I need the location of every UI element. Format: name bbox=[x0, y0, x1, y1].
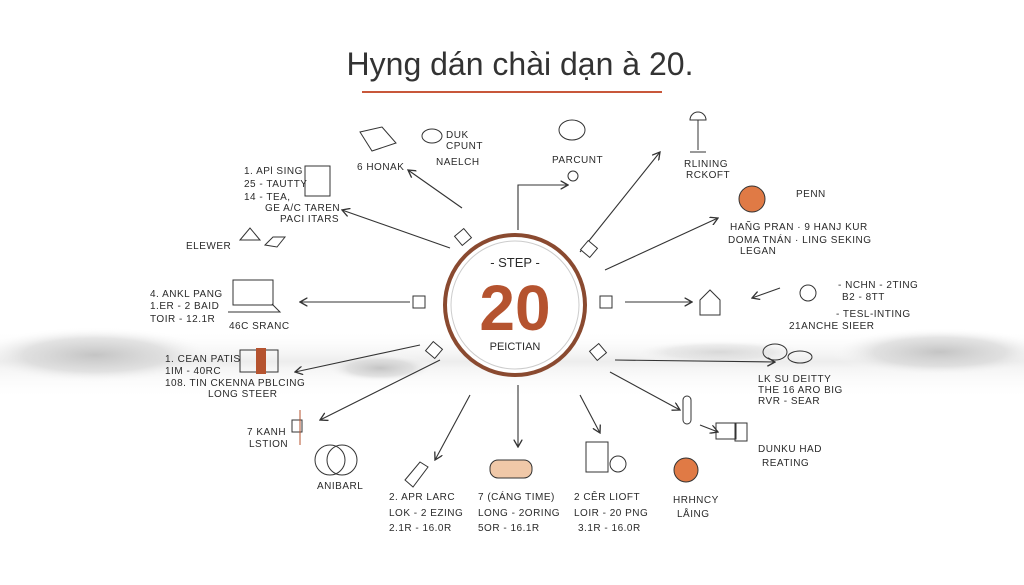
items bottom: LONG - 2ORING bbox=[478, 508, 560, 519]
items right: 21ANCHE bbox=[789, 321, 839, 332]
center circle: PEICTIAN bbox=[490, 341, 540, 353]
items left: 25 - TAUTTY bbox=[244, 179, 307, 190]
center circle: - STEP - bbox=[490, 255, 540, 270]
items bottom: LOIR - 20 PNG bbox=[574, 508, 648, 519]
small step tags bbox=[413, 229, 612, 360]
items right: LEGAN bbox=[740, 246, 776, 257]
items right: REATING bbox=[762, 458, 809, 469]
items right: DUNKU HAD bbox=[758, 444, 822, 455]
items bottom: 2. APR LARC bbox=[389, 492, 455, 503]
arrows bbox=[295, 152, 780, 460]
items right: - TESL-INTING bbox=[836, 309, 911, 320]
center circle: 20 bbox=[479, 272, 551, 344]
items left: ELEWER bbox=[186, 241, 231, 252]
items left: DUK bbox=[446, 130, 469, 141]
items right: THE 16 ARO BIG bbox=[758, 385, 843, 396]
items right: RVR - SEAR bbox=[758, 396, 820, 407]
items left: 4. ANKL PANG bbox=[150, 289, 223, 300]
items right: HRHNCY bbox=[673, 495, 719, 506]
items left: TOIR - 12.1R bbox=[150, 314, 215, 325]
items right: LK SU DEITTY bbox=[758, 374, 831, 385]
items left: 7 KANH bbox=[247, 427, 286, 438]
items right: - NCHN - 2TING bbox=[838, 280, 918, 291]
items right: RCKOFT bbox=[686, 170, 730, 181]
items left: NAELCH bbox=[436, 157, 480, 168]
items left: 46C SRANC bbox=[229, 321, 290, 332]
center circle bbox=[445, 235, 585, 375]
mist background bbox=[0, 327, 1024, 400]
items right: RLINING bbox=[684, 159, 728, 170]
items right: PENN bbox=[796, 189, 826, 200]
title: Hyng dán chài dạn à 20. bbox=[347, 46, 693, 82]
items bottom bbox=[389, 442, 648, 534]
items right bbox=[673, 112, 918, 520]
items left: ANIBARL bbox=[317, 481, 363, 492]
items left: 1.ER - 2 BAID bbox=[150, 301, 219, 312]
items bottom: 7 (CÁNG TIME) bbox=[478, 490, 555, 503]
items right: SIEER bbox=[842, 321, 875, 332]
items left: PACI ITARS bbox=[280, 214, 339, 225]
items bottom: 3.1R - 16.0R bbox=[578, 523, 641, 534]
items left: LONG STEER bbox=[208, 389, 277, 400]
items bottom: 5OR - 16.1R bbox=[478, 523, 540, 534]
items left: 6 HONAK bbox=[357, 162, 404, 173]
items right: LÅING bbox=[677, 507, 710, 520]
items left: 1. APl SING bbox=[244, 166, 303, 177]
items left: 1. CEAN PATIS bbox=[165, 354, 241, 365]
items left: GE A/C TAREN bbox=[265, 203, 340, 214]
items right: HAÑG PRAN · 9 HANJ KUR bbox=[730, 220, 868, 233]
items left: 1IM - 40RC bbox=[165, 366, 221, 377]
items left: LSTION bbox=[249, 439, 288, 450]
items bottom: 2.1R - 16.0R bbox=[389, 523, 452, 534]
items left: PARCUNT bbox=[552, 155, 603, 166]
items left: 14 - TEA, bbox=[244, 192, 291, 203]
items left: 108. TIN CKENNA PBLCING bbox=[165, 378, 305, 389]
items left: CPUNT bbox=[446, 141, 483, 152]
items left bbox=[150, 120, 603, 492]
items right: DOMA TNÁN · LING SEKING bbox=[728, 233, 872, 246]
items bottom: LOK - 2 EZING bbox=[389, 508, 463, 519]
items right: B2 - 8TT bbox=[842, 292, 885, 303]
items bottom: 2 CÊR LIOFT bbox=[574, 490, 640, 503]
